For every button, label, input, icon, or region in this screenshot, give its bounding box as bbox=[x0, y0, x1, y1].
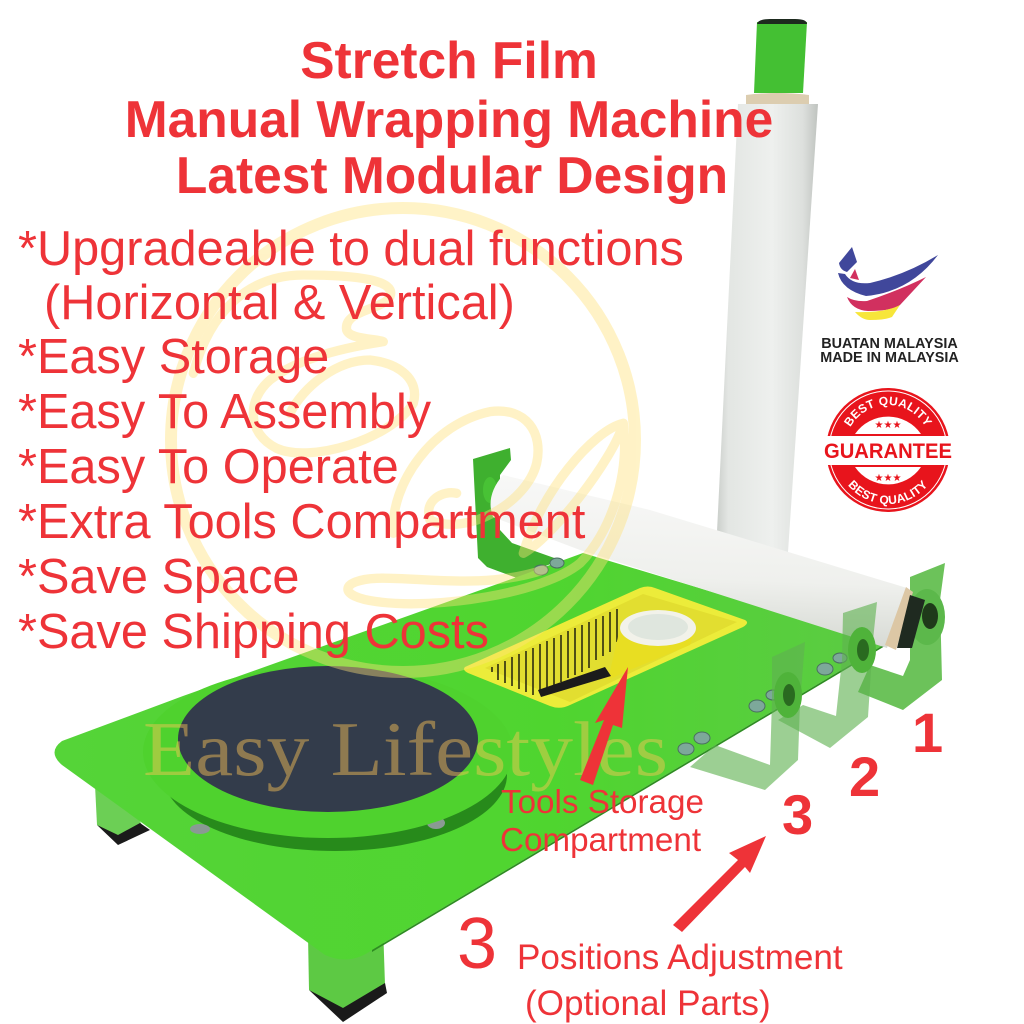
watermark script monogram bbox=[193, 275, 625, 604]
Malaysia wording: BUATAN MALAYSIA bbox=[821, 336, 958, 352]
tan cardboard core bbox=[746, 93, 809, 105]
centre band bbox=[822, 436, 954, 465]
front leg bbox=[308, 925, 387, 1022]
hardware under turntable bbox=[190, 817, 445, 834]
badge disc bbox=[826, 388, 950, 512]
feature list: *Easy To Operate bbox=[18, 440, 399, 494]
vent slots bbox=[492, 609, 617, 695]
mounting bolts bbox=[534, 558, 847, 755]
left core bbox=[483, 477, 497, 503]
shadow under turntable bbox=[163, 699, 507, 851]
packing tape roll bbox=[608, 610, 696, 680]
tools compartment basket bbox=[464, 586, 747, 708]
stars: ★★★ bbox=[875, 420, 901, 431]
title: Manual Wrapping Machine bbox=[125, 90, 773, 148]
position numbers bbox=[782, 701, 943, 846]
feature list bbox=[18, 222, 684, 659]
logo watermark bbox=[171, 208, 635, 672]
position brackets bbox=[858, 563, 945, 710]
inner white segments bbox=[855, 417, 921, 434]
feature list: *Save Shipping Costs bbox=[18, 605, 489, 659]
positions count numeral: 3 bbox=[457, 904, 497, 984]
feature list: *Easy Storage bbox=[18, 330, 329, 384]
black rubber pad bbox=[178, 666, 478, 812]
horizontal stretch film roll bbox=[483, 475, 925, 650]
green core top bbox=[754, 19, 807, 93]
compartment label: Compartment bbox=[500, 822, 701, 859]
vertical stretch film roll bbox=[716, 19, 818, 552]
compartment label bbox=[500, 784, 704, 859]
position numbers: 3 bbox=[782, 783, 813, 846]
title bbox=[125, 31, 773, 204]
feature list: *Easy To Assembly bbox=[18, 385, 432, 439]
guarantee wording: GUARANTEE bbox=[824, 440, 952, 463]
film body bbox=[491, 475, 907, 648]
Malaysia wording bbox=[820, 336, 959, 366]
guarantee badge: ★★★ bbox=[875, 473, 901, 484]
machine base plate bbox=[54, 448, 885, 1022]
title: Latest Modular Design bbox=[176, 146, 728, 204]
watermark ring bbox=[171, 208, 635, 672]
bracket 1 bbox=[858, 563, 945, 710]
right cardboard core bbox=[885, 587, 913, 650]
compartment label: Tools Storage bbox=[501, 784, 704, 821]
back bracket upright bbox=[473, 448, 560, 578]
arrow to compartment bbox=[580, 667, 628, 785]
turntable bbox=[143, 666, 513, 851]
pen bbox=[538, 667, 611, 697]
transparent brackets bbox=[690, 602, 877, 790]
arrow to adjustment positions bbox=[673, 836, 766, 932]
position numbers: 1 bbox=[912, 701, 943, 764]
curved quality wording: BEST QUALITY bbox=[844, 396, 932, 426]
swoosh mark bbox=[838, 247, 938, 320]
position numbers: 2 bbox=[849, 745, 880, 808]
basket inside bbox=[485, 594, 737, 702]
yellow rim bbox=[464, 586, 747, 708]
bracket 2 bbox=[778, 602, 877, 748]
title: Stretch Film bbox=[300, 31, 598, 89]
guarantee badge: BEST QUALITY bbox=[848, 480, 926, 506]
rear leg bbox=[95, 785, 150, 845]
made in Malaysia logo bbox=[820, 247, 959, 366]
positions adjustment label: Positions Adjustment bbox=[517, 938, 843, 977]
film body bbox=[716, 104, 818, 552]
feature list: *Upgradeable to dual functions bbox=[18, 222, 684, 276]
bracket 3 bbox=[690, 642, 805, 790]
feature list: *Save Space bbox=[18, 550, 300, 604]
plate surface bbox=[54, 553, 885, 959]
feature list: *Extra Tools Compartment bbox=[18, 495, 586, 549]
green disc bbox=[143, 666, 513, 838]
Malaysia wording: MADE IN MALAYSIA bbox=[820, 350, 959, 366]
plate lower edge bbox=[372, 644, 885, 952]
positions adjustment label: (Optional Parts) bbox=[525, 984, 771, 1023]
feature list: (Horizontal & Vertical) bbox=[44, 276, 515, 330]
guarantee badge bbox=[824, 388, 952, 512]
watermark wordmark: Easy Lifestyles bbox=[143, 706, 668, 792]
positions adjustment label bbox=[517, 938, 843, 1023]
